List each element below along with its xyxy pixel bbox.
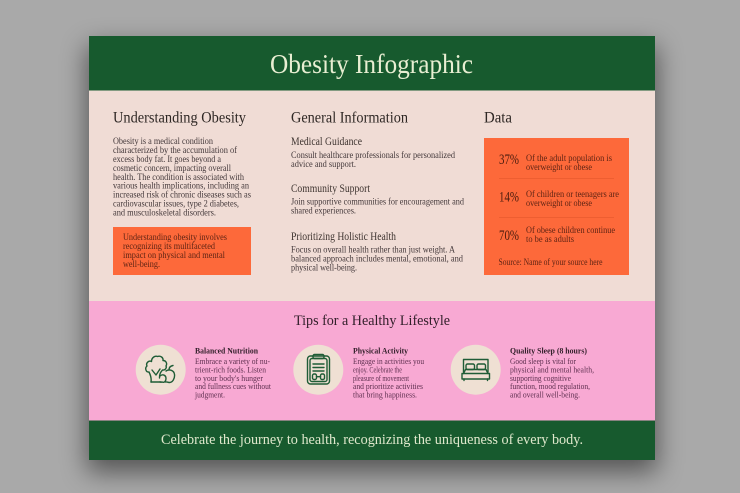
tip text bbox=[353, 346, 425, 400]
footer band bbox=[89, 420, 655, 460]
text block: community support bbox=[291, 183, 465, 216]
tip text: and fullness cues without bbox=[195, 381, 271, 391]
tip text: Engage in activities you bbox=[353, 356, 425, 366]
tip text: and prioritize activities bbox=[353, 381, 424, 391]
tip text: and overall well-being. bbox=[510, 390, 580, 400]
tip text: physical and mental health, bbox=[510, 364, 594, 374]
stat: 37%: 37% bbox=[499, 152, 519, 168]
text block: prioritizing holistic health: Prioritizing Holistic Health bbox=[291, 231, 396, 243]
tip text bbox=[510, 346, 594, 400]
panel: data bbox=[484, 110, 629, 275]
tip text: supporting cognitive bbox=[510, 373, 571, 383]
footer message: Celebrate the journey to health, recognizing the uniqueness of every body. bbox=[161, 432, 583, 448]
tip: balanced nutrition bbox=[136, 345, 271, 400]
panel: main content bbox=[89, 90, 655, 302]
callout bbox=[113, 227, 251, 275]
callout: well-being. bbox=[123, 259, 160, 269]
text block: definition: and musculoskeletal disorders. bbox=[113, 208, 216, 218]
panel: tips bbox=[89, 301, 655, 420]
text block: definition: health. The condition is associated with bbox=[113, 172, 245, 182]
stat: 14% bbox=[499, 189, 619, 208]
text block: definition bbox=[113, 136, 252, 218]
tip: quality sleep bbox=[451, 345, 594, 400]
tip text: that bring happiness. bbox=[353, 390, 417, 400]
stat: 70%: 70% bbox=[499, 228, 519, 244]
panel: general information bbox=[291, 110, 465, 272]
tip text: Good sleep is vital for bbox=[510, 356, 576, 366]
tip text: pleasure of movement bbox=[353, 373, 409, 383]
tip text: Balanced Nutrition bbox=[195, 346, 258, 356]
tip text: Quality Sleep (8 hours) bbox=[510, 346, 587, 356]
tip text: to your body's hunger bbox=[195, 373, 263, 383]
text block: definition: excess body fat. It goes beyond a bbox=[113, 154, 221, 164]
stat: 37% bbox=[499, 152, 613, 172]
icon: bed bbox=[462, 360, 490, 380]
text block: medical guidance bbox=[291, 136, 456, 169]
text block: community support: shared experiences. bbox=[291, 206, 356, 216]
text block: definition: Obesity is a medical condition bbox=[113, 136, 214, 146]
panel: understanding obesity bbox=[113, 110, 252, 275]
tip text: Embrace a variety of nu- bbox=[195, 356, 270, 366]
text block: medical guidance: advice and support. bbox=[291, 159, 356, 169]
heading: general information: General Information bbox=[291, 110, 408, 126]
tip text: trient-rich foods. Listen bbox=[195, 364, 267, 374]
stat: 70%: to be as adults bbox=[526, 234, 575, 244]
tip text: function, mood regulation, bbox=[510, 381, 590, 391]
stat: 14%: 14% bbox=[499, 190, 519, 206]
heading: understanding obesity: Understanding Obesity bbox=[113, 110, 246, 126]
tip text: judgment. bbox=[194, 390, 225, 400]
tip text: Physical Activity bbox=[353, 346, 409, 356]
text block: prioritizing holistic health: balanced approach includes mental, emotional, and bbox=[291, 254, 464, 264]
text block: definition: increased risk of chronic diseases such as bbox=[113, 190, 252, 200]
icon: broccoli and apple bbox=[146, 356, 175, 382]
text block: definition: various health implications, including an bbox=[113, 181, 250, 191]
tip: physical activity bbox=[293, 345, 425, 400]
stat: 14%: overweight or obese bbox=[526, 198, 592, 208]
text block: prioritizing holistic health: physical well-being. bbox=[291, 262, 357, 272]
icon: clipboard with dumbbell bbox=[308, 354, 330, 384]
text block: community support: Join supportive communities for encouragement and bbox=[291, 196, 465, 206]
callout: Understanding obesity involves bbox=[123, 232, 228, 242]
stat: 37%: overweight or obese bbox=[526, 162, 592, 172]
text block: definition: characterized by the accumulation of bbox=[113, 145, 237, 155]
text block: definition: cardiovascular issues, type 2 diabetes, bbox=[113, 199, 239, 209]
tip text bbox=[194, 346, 271, 400]
stat: 70%: Of obese children continue bbox=[526, 225, 615, 235]
stat: 37%: Of the adult population is bbox=[526, 153, 613, 163]
text block: medical guidance: Consult healthcare professionals for personalized bbox=[291, 150, 456, 160]
title: Obesity Infographic bbox=[270, 49, 473, 79]
header band bbox=[89, 36, 655, 90]
source: Source: Name of your source here bbox=[498, 257, 603, 267]
heading: data: Data bbox=[484, 110, 512, 126]
stat: 70% bbox=[499, 225, 615, 244]
stat: 14%: Of children or teenagers are bbox=[526, 189, 619, 199]
data card bbox=[484, 138, 629, 275]
text block: community support: Community Support bbox=[291, 183, 371, 195]
text block: definition: cosmetic concern, impacting overall bbox=[113, 163, 231, 173]
text block: prioritizing holistic health bbox=[291, 231, 464, 272]
tip text: enjoy. Celebrate the bbox=[353, 364, 402, 374]
heading: tips: Tips for a Healthy Lifestyle bbox=[294, 313, 450, 329]
callout: impact on physical and mental bbox=[123, 250, 225, 260]
text block: medical guidance: Medical Guidance bbox=[291, 136, 362, 148]
text block: prioritizing holistic health: Focus on overall health rather than just weight. A bbox=[291, 244, 456, 254]
callout: recognizing its multifaceted bbox=[123, 241, 216, 251]
